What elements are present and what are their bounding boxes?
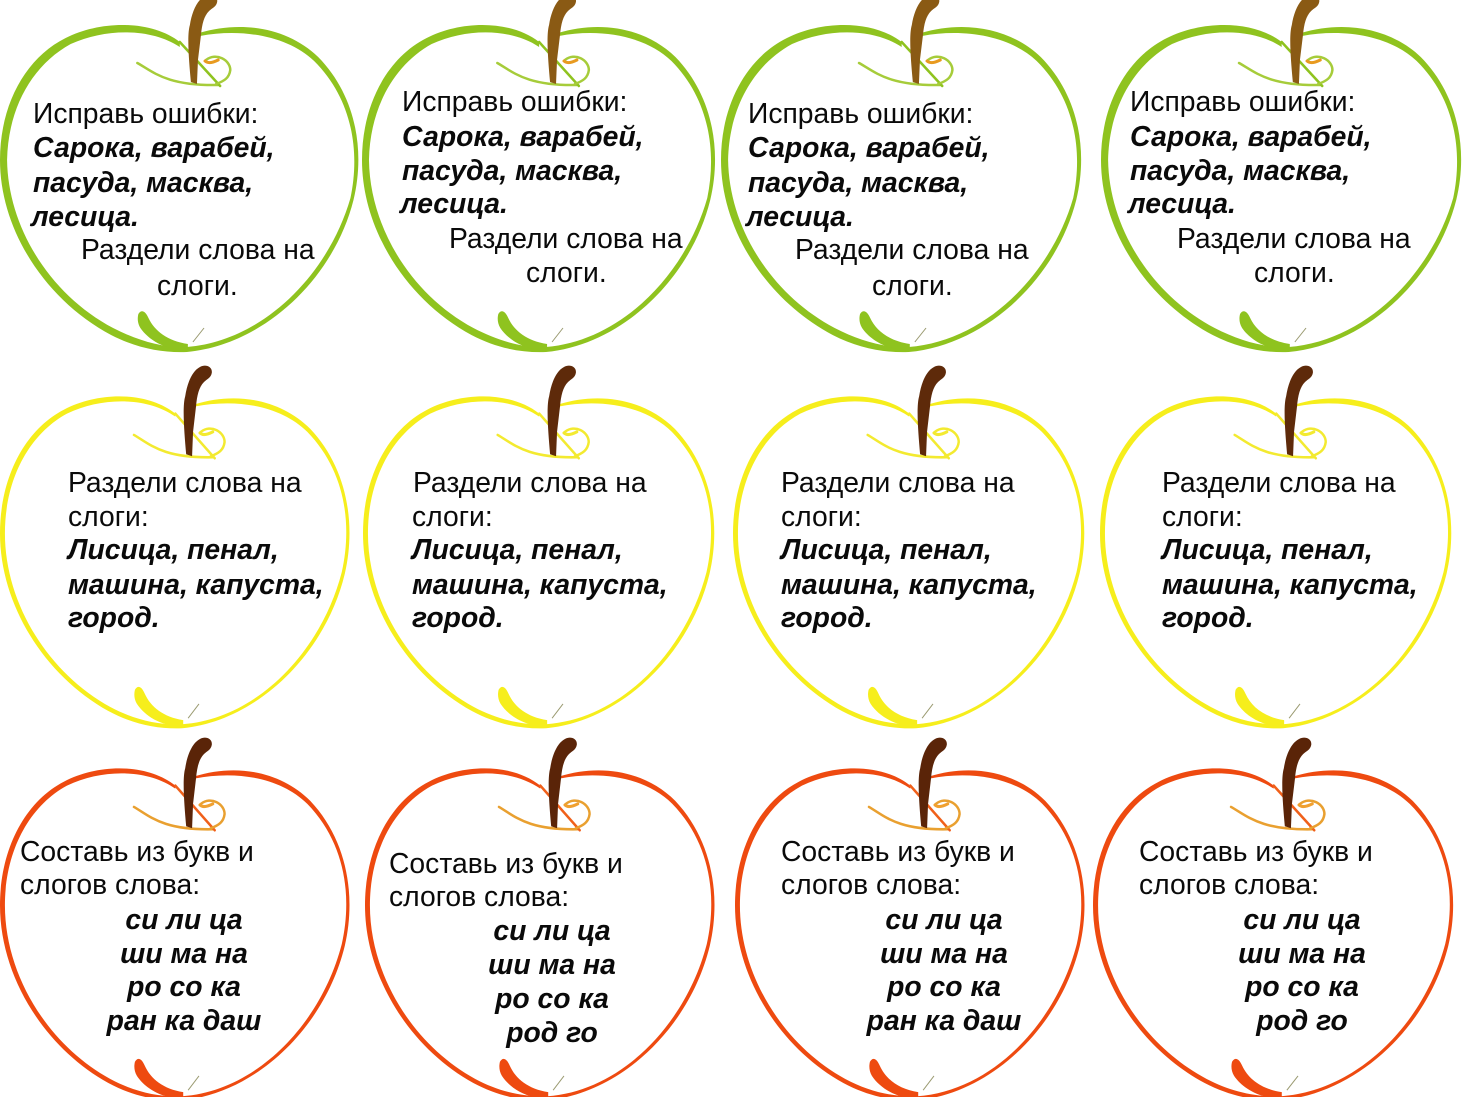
- apple card: red 4: [1093, 738, 1453, 1097]
- task text: слоги.: [872, 269, 953, 301]
- apple card: yellow 4: [1100, 366, 1451, 728]
- task text: Лисица, пенал,: [1160, 533, 1373, 565]
- task text: Исправь ошибки:: [748, 97, 973, 129]
- task text: слогов слова:: [781, 868, 961, 900]
- task text: си ли ца: [125, 903, 243, 935]
- task text: ро со ка: [1244, 970, 1359, 1002]
- task text: ши ма на: [120, 937, 248, 969]
- task text: Составь из букв и: [781, 835, 1015, 867]
- task text: слоги:: [412, 500, 493, 532]
- task text: лесица.: [744, 200, 854, 232]
- task text: машина, капуста,: [68, 568, 324, 600]
- apple outline: [733, 366, 1084, 728]
- apple card: yellow 1: [0, 366, 349, 728]
- apple outline: [0, 738, 349, 1097]
- task text: слогов слова:: [20, 868, 200, 900]
- task text: лесица.: [398, 187, 508, 219]
- apple card: yellow 2: [363, 366, 714, 728]
- task text: ро со ка: [886, 970, 1001, 1002]
- task text: род го: [505, 1016, 598, 1048]
- task text: лесица.: [29, 200, 139, 232]
- task text: Раздели слова на: [1162, 466, 1396, 498]
- task text: Лисица, пенал,: [410, 533, 623, 565]
- task text: [20, 835, 261, 1036]
- task text: ши ма на: [1238, 937, 1366, 969]
- task text: Раздели слова на: [1177, 222, 1411, 254]
- task text: [779, 466, 1037, 633]
- task text: [66, 466, 324, 633]
- task text: пасуда, масква,: [748, 166, 968, 198]
- task text: ро со ка: [494, 982, 609, 1014]
- apple outline: [1100, 366, 1451, 728]
- apple outline: [0, 0, 358, 352]
- task text: [781, 835, 1021, 1036]
- apple outline: [362, 0, 715, 352]
- task text: ро со ка: [126, 970, 241, 1002]
- apple outline: [363, 366, 714, 728]
- task text: Раздели слова на: [781, 466, 1015, 498]
- task text: [389, 847, 623, 1048]
- task text: ши ма на: [488, 948, 616, 980]
- task text: [398, 85, 683, 288]
- apple outline: [721, 0, 1081, 352]
- task text: город.: [1162, 601, 1254, 633]
- task text: Исправь ошибки:: [33, 97, 258, 129]
- task text: [744, 97, 1029, 301]
- task text: ран ка даш: [866, 1004, 1021, 1036]
- task text: Сарока, варабей,: [402, 120, 643, 152]
- task text: пасуда, масква,: [1130, 154, 1350, 186]
- apple card: green 3: [721, 0, 1081, 352]
- task text: Раздели слова на: [413, 466, 647, 498]
- task text: слоги:: [68, 500, 149, 532]
- task text: Сарока, варабей,: [748, 131, 989, 163]
- apple outline: [365, 738, 714, 1097]
- apple outline: [735, 738, 1084, 1097]
- task text: слоги.: [526, 256, 607, 288]
- task text: си ли ца: [1243, 903, 1361, 935]
- task text: Исправь ошибки:: [402, 85, 627, 117]
- task text: пасуда, масква,: [33, 166, 253, 198]
- task text: город.: [412, 601, 504, 633]
- task text: слогов слова:: [389, 880, 569, 912]
- task text: слоги.: [1254, 256, 1335, 288]
- task text: Составь из букв и: [20, 835, 254, 867]
- task text: ши ма на: [880, 937, 1008, 969]
- apple outline: [1093, 738, 1453, 1097]
- apple card: red 3: [735, 738, 1084, 1097]
- task text: слоги:: [1162, 500, 1243, 532]
- apple card: green 2: [362, 0, 715, 352]
- task text: слоги.: [157, 269, 238, 301]
- task text: Лисица, пенал,: [779, 533, 992, 565]
- task text: Сарока, варабей,: [1130, 120, 1371, 152]
- task text: город.: [68, 601, 160, 633]
- apple outline: [0, 366, 349, 728]
- task text: машина, капуста,: [781, 568, 1037, 600]
- task text: [1126, 85, 1411, 288]
- task text: Раздели слова на: [449, 222, 683, 254]
- task text: [1160, 466, 1418, 633]
- task text: Составь из букв и: [1139, 835, 1373, 867]
- task text: Исправь ошибки:: [1130, 85, 1355, 117]
- apple card: green 4: [1101, 0, 1461, 352]
- task text: лесица.: [1126, 187, 1236, 219]
- task text: машина, капуста,: [412, 568, 668, 600]
- task text: слоги:: [781, 500, 862, 532]
- task text: Раздели слова на: [68, 466, 302, 498]
- task text: город.: [781, 601, 873, 633]
- task text: ран ка даш: [106, 1004, 261, 1036]
- task text: пасуда, масква,: [402, 154, 622, 186]
- apple card: yellow 3: [733, 366, 1084, 728]
- task text: род го: [1255, 1004, 1348, 1036]
- apple card: red 2: [365, 738, 714, 1097]
- task text: си ли ца: [885, 903, 1003, 935]
- task text: [29, 97, 315, 301]
- apple card: green 1: [0, 0, 358, 352]
- apple outline: [1101, 0, 1461, 352]
- task text: Раздели слова на: [81, 233, 315, 265]
- task text: Раздели слова на: [795, 233, 1029, 265]
- task text: машина, капуста,: [1162, 568, 1418, 600]
- task text: [1139, 835, 1373, 1036]
- task text: Лисица, пенал,: [66, 533, 279, 565]
- task text: си ли ца: [493, 914, 611, 946]
- task text: Составь из букв и: [389, 847, 623, 879]
- apple card: red 1: [0, 738, 349, 1097]
- task text: Сарока, варабей,: [33, 131, 274, 163]
- task text: [410, 466, 668, 633]
- task text: слогов слова:: [1139, 868, 1319, 900]
